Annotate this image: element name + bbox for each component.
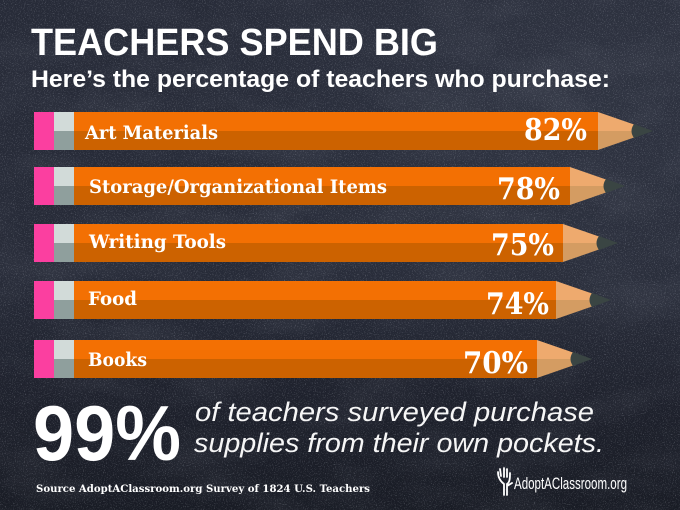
value: 70% (463, 346, 528, 381)
wordmark: AdoptAClassroom.org (514, 474, 627, 493)
label: Storage/Organizational Items (89, 176, 387, 198)
pencil bar: Storage/Organizational Items 78% (34, 167, 625, 207)
label: Books (88, 349, 147, 371)
value: 75% (491, 228, 554, 263)
big statistic: 99% (33, 389, 181, 477)
statement text: of teachers surveyed purchase (195, 397, 594, 427)
label: Art Materials (84, 122, 218, 144)
title: TEACHERS SPEND BIG (31, 22, 438, 64)
pencil bar: Art Materials 82% (34, 112, 653, 150)
label: Food (88, 288, 137, 310)
label: Writing Tools (88, 231, 226, 253)
value: 82% (524, 113, 587, 148)
statement text (194, 397, 604, 458)
pencil bar: Books 70% (34, 340, 592, 381)
logo: AdoptAClassroom.org (498, 468, 627, 495)
icon: hand (498, 468, 512, 495)
subtitle: Here’s the percentage of teachers who purchase: (31, 66, 610, 93)
pencil bar: Writing Tools 75% (34, 224, 618, 263)
value: 78% (497, 172, 560, 207)
source note: Source AdoptAClassroom.org Survey of 1824 U.S. Teachers (36, 483, 370, 495)
value: 74% (486, 287, 549, 322)
pencil bar: Food 74% (34, 281, 611, 322)
statement text: supplies from their own pockets. (194, 428, 604, 458)
